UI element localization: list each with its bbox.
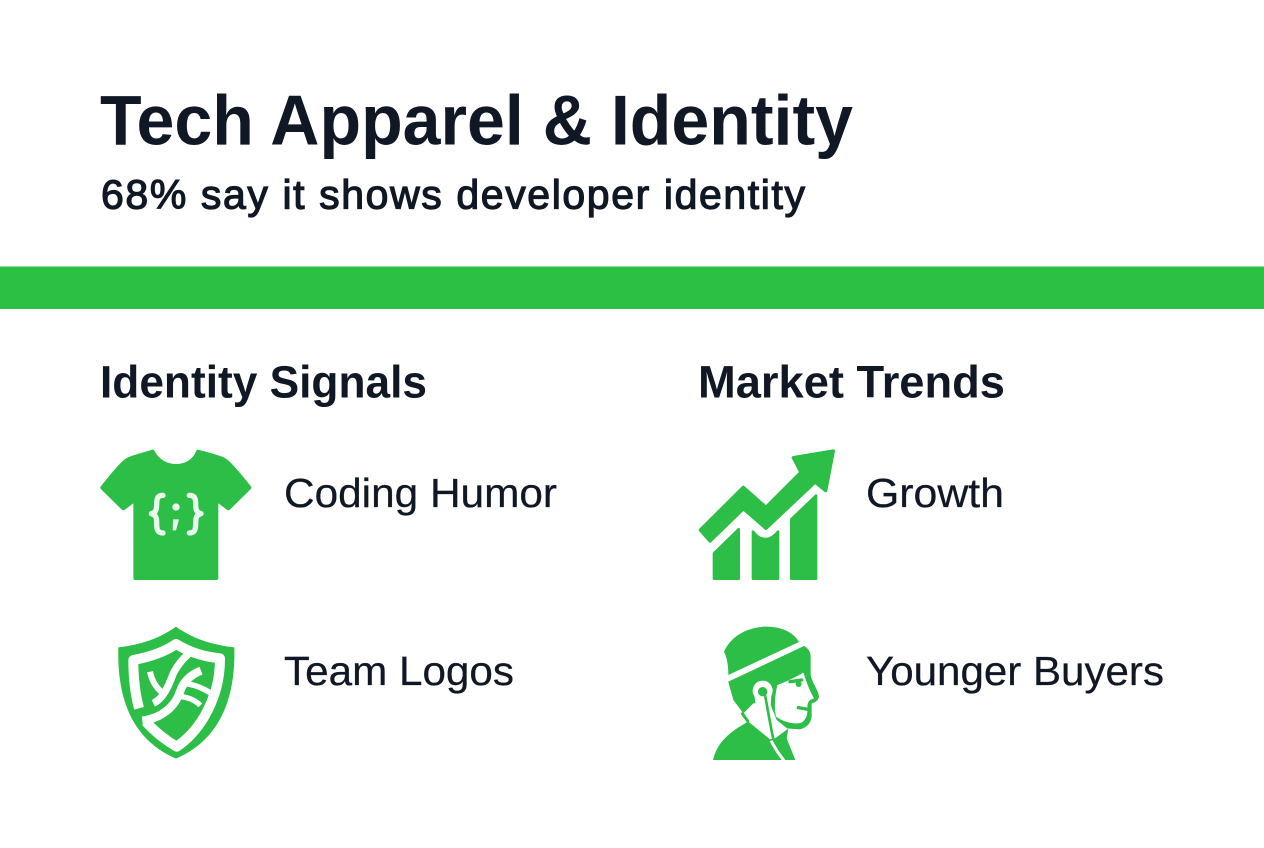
label: growth: Growth <box>866 470 1004 516</box>
hair to body link <box>742 713 748 722</box>
label: younger buyers: Younger Buyers <box>866 648 1164 694</box>
icon: growth chart <box>700 451 833 579</box>
earphone wire <box>765 695 773 739</box>
eye and mouth <box>790 680 808 709</box>
subtitle: 68% say it shows developer identity <box>101 172 806 218</box>
label: team logos: Team Logos <box>284 648 514 694</box>
icon: t-shirt with code braces <box>102 452 249 578</box>
bars <box>714 529 739 579</box>
head and body <box>713 646 819 761</box>
code symbol <box>151 495 201 533</box>
green divider band <box>0 266 1264 309</box>
face <box>775 673 814 723</box>
body <box>713 722 795 760</box>
ear ring <box>753 681 773 701</box>
title: Tech Apparel & Identity <box>100 80 853 160</box>
icon: young buyer with beanie and earphones <box>713 627 819 761</box>
icon: team logo shield <box>118 627 234 759</box>
neck <box>747 703 788 738</box>
heading: identity signals: Identity Signals <box>100 356 427 408</box>
panel: identity signals <box>100 356 557 759</box>
beanie <box>724 627 799 675</box>
heading: market trends: Market Trends <box>698 356 1005 408</box>
rising arrow <box>700 451 833 541</box>
panel: market trends <box>698 356 1164 761</box>
label: coding humor: Coding Humor <box>284 470 557 516</box>
head <box>728 646 819 729</box>
